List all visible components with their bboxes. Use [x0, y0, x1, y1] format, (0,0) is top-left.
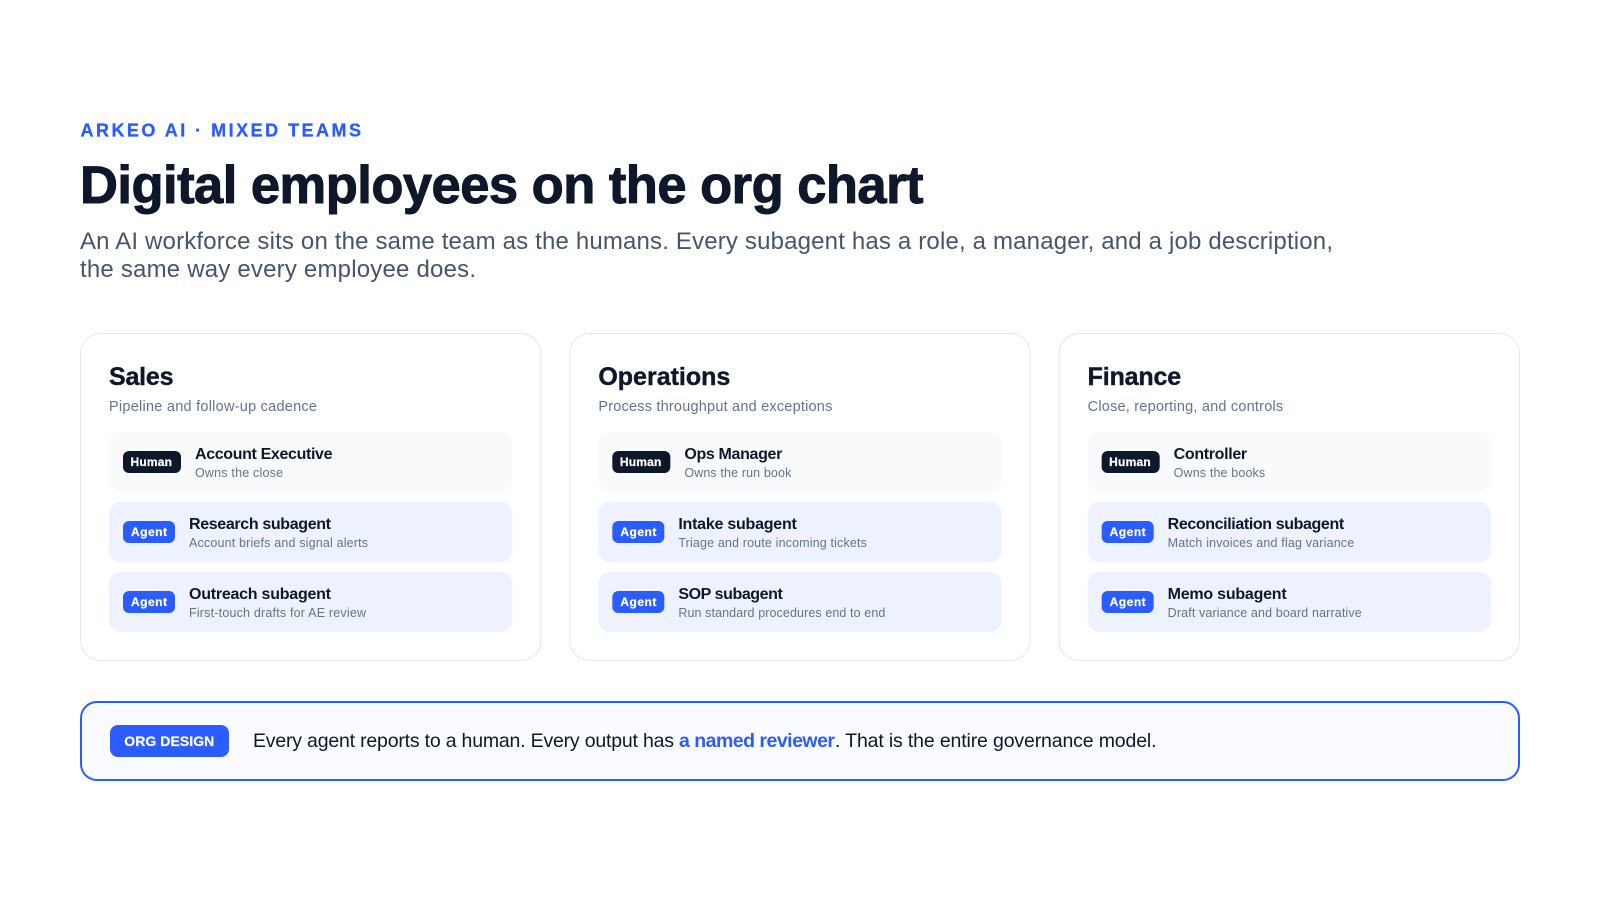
callout text: Every agent reports to a human. Every output has [253, 730, 674, 752]
row: Research subagent: Agent [131, 525, 167, 539]
row: Outreach subagent: Agent [131, 595, 167, 609]
row: SOP subagent [598, 572, 1002, 632]
row: Reconciliation subagent: Match invoices and flag variance [1168, 536, 1354, 550]
row: Ops Manager: Human [620, 455, 661, 469]
callout text: a named reviewer [679, 730, 835, 752]
row: Research subagent: Account briefs and signal alerts [189, 536, 368, 550]
row: SOP subagent: Agent [620, 595, 656, 609]
eyebrow: ARKEO AI · MIXED TEAMS [80, 120, 361, 140]
row: Controller: Human [1109, 455, 1151, 469]
Operations heading: Operations [598, 363, 730, 391]
panel: Finance [1059, 334, 1520, 660]
Sales description: Pipeline and follow-up cadence [109, 399, 317, 415]
row: Memo subagent [1088, 572, 1491, 632]
row: Controller: Controller [1174, 446, 1247, 463]
row: SOP subagent: SOP subagent [678, 586, 784, 603]
row: Ops Manager: Ops Manager [684, 446, 782, 463]
row: Outreach subagent [109, 572, 512, 632]
row: Controller: Owns the books [1174, 466, 1265, 480]
row: Memo subagent: Memo subagent [1168, 586, 1287, 603]
Finance description: Close, reporting, and controls [1088, 399, 1283, 415]
row: Memo subagent: Draft variance and board narrative [1168, 606, 1362, 620]
row: Account Executive: Account Executive [195, 446, 333, 463]
row: Intake subagent: Triage and route incoming tickets [678, 536, 867, 550]
row: Reconciliation subagent: Reconciliation subagent [1168, 516, 1345, 533]
row: Account Executive: Owns the close [195, 466, 283, 480]
Operations description: Process throughput and exceptions [598, 399, 832, 415]
callout badge: ORG DESIGN [124, 733, 214, 749]
subtitle [80, 228, 1333, 283]
row: Intake subagent: Intake subagent [678, 516, 798, 533]
title: Digital employees on the org chart [80, 156, 924, 215]
Sales heading: Sales [109, 363, 174, 391]
row: Memo subagent: Agent [1110, 595, 1146, 609]
row: Intake subagent: Agent [620, 525, 656, 539]
panel: Operations [570, 334, 1030, 660]
callout: org design [81, 702, 1519, 780]
callout text [253, 730, 1156, 752]
row: Account Executive: Human [130, 455, 172, 469]
subtitle: An AI workforce sits on the same team as the humans. Every subagent has a role, a manager, and a job description, [80, 228, 1333, 255]
row: Controller [1088, 432, 1491, 492]
row: Intake subagent [598, 502, 1002, 562]
row: Outreach subagent: Outreach subagent [189, 586, 332, 603]
row: Reconciliation subagent [1088, 502, 1491, 562]
row: Research subagent [109, 502, 512, 562]
callout badge [110, 725, 229, 757]
subtitle: the same way every employee does. [80, 256, 476, 283]
row: Research subagent: Research subagent [189, 516, 332, 533]
row: Ops Manager: Owns the run book [684, 466, 792, 480]
row: Outreach subagent: First-touch drafts for AE review [189, 606, 367, 620]
callout text: . That is the entire governance model. [835, 730, 1156, 752]
panel: Sales [80, 334, 541, 660]
row: SOP subagent: Run standard procedures end to end [678, 606, 885, 620]
row: Ops Manager [598, 432, 1002, 492]
row: Account Executive [109, 432, 512, 492]
row: Reconciliation subagent: Agent [1110, 525, 1146, 539]
Finance heading: Finance [1088, 363, 1181, 391]
